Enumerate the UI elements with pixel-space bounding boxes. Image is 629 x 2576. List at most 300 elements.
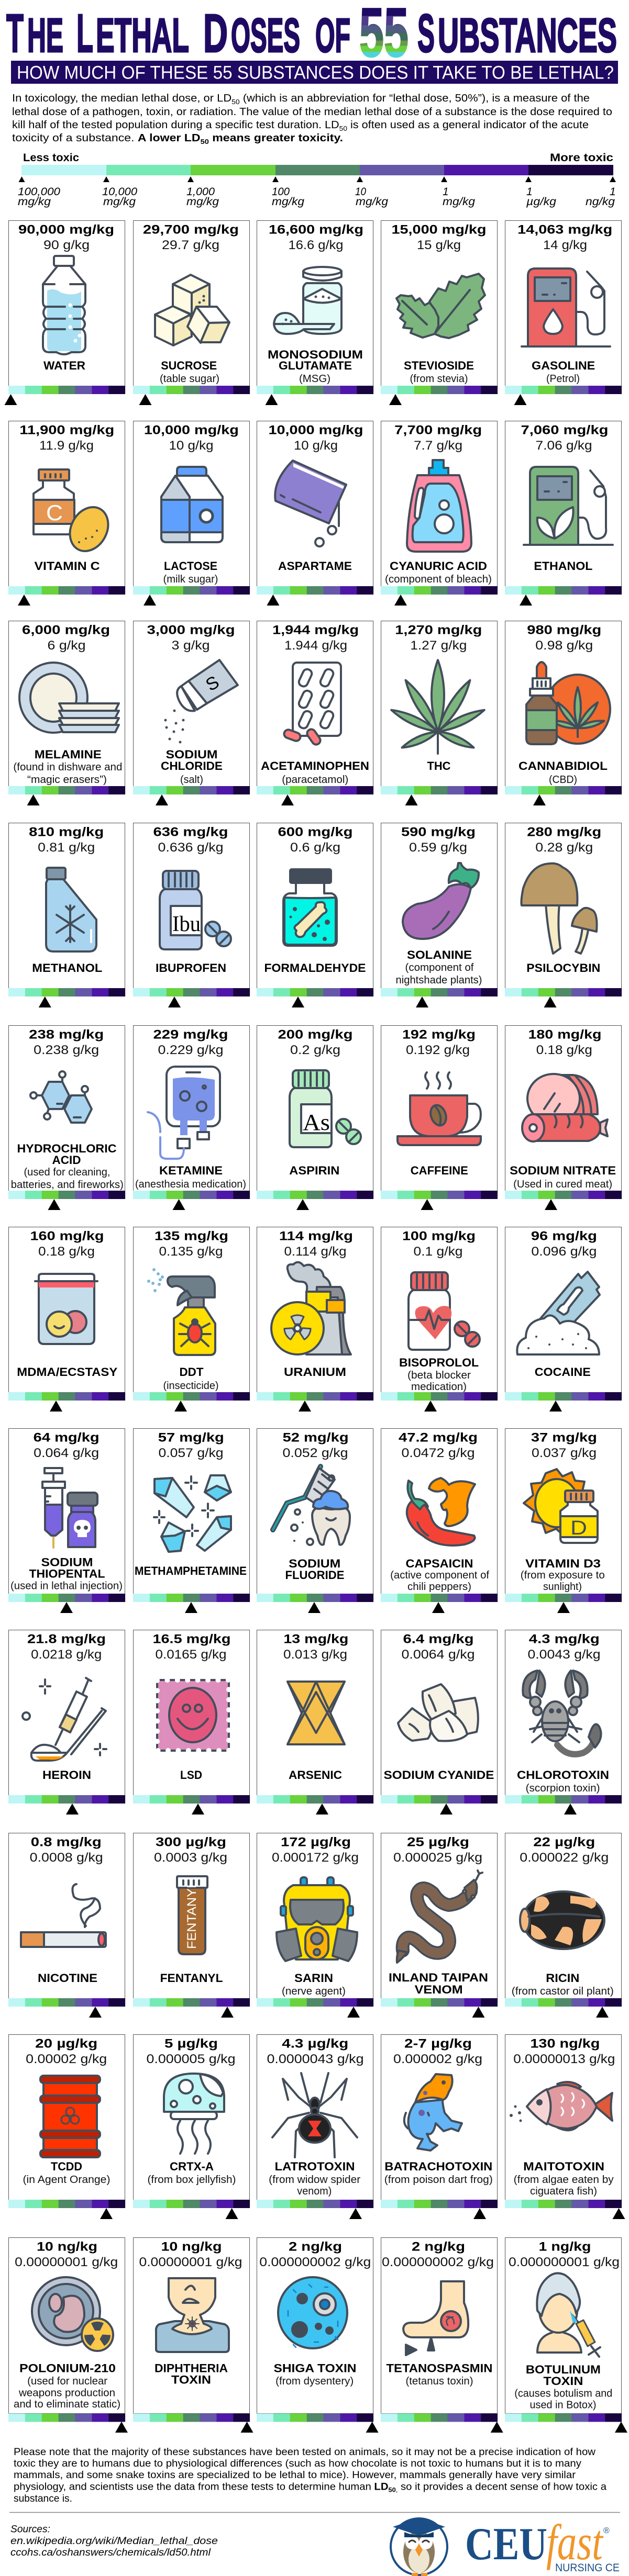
sodium nitrate dose: 180 mg/kg <box>528 1028 601 1041</box>
maitotoxin name <box>514 2160 614 2197</box>
msg name: GLUTAMATE <box>279 359 352 372</box>
aspirin dose: 0.2 g/kg <box>290 1043 340 1057</box>
maitotoxin name: MAITOTOXIN <box>523 2160 604 2173</box>
shiga dose: 2 ng/kg <box>289 2240 342 2254</box>
icon: milk carton <box>161 467 223 542</box>
cocaine dose <box>531 1229 597 1259</box>
crtx-a name <box>148 2160 236 2186</box>
latrotoxin name <box>269 2160 361 2197</box>
scale marker <box>226 2208 238 2219</box>
melamine name: (found in dishware and <box>13 761 122 773</box>
diphtheria dose: 0.00000001 g/kg <box>139 2255 242 2269</box>
sources: en.wikipedia.org/wiki/Median_lethal_dose <box>10 2536 218 2547</box>
vitamin d3 name <box>521 1557 605 1593</box>
scale marker <box>173 1199 185 1210</box>
caffeine dose <box>402 1028 476 1057</box>
ricin name: RICIN <box>546 1972 579 1985</box>
icon: sun and bottle: D <box>570 1517 587 1539</box>
diphtheria name: TOXIN <box>171 2373 211 2387</box>
title: ETHAL <box>96 9 189 62</box>
sodium nitrate name: SODIUM NITRATE <box>510 1164 616 1177</box>
scale marker <box>174 1401 187 1412</box>
icon: pill bag <box>35 1274 97 1344</box>
scale marker <box>533 794 546 805</box>
diphtheria dose: 10 ng/kg <box>161 2240 222 2254</box>
sodium chloride name: (salt) <box>180 774 203 786</box>
card: lactose <box>133 421 250 606</box>
toxicity scale legend: 1 <box>526 186 533 198</box>
shiga name: SHIGA TOXIN <box>273 2361 356 2375</box>
sucrose name: SUCROSE <box>161 359 217 372</box>
water name: WATER <box>43 359 85 372</box>
scale marker <box>557 1602 570 1613</box>
title: T <box>6 3 24 63</box>
inland taipan dose <box>393 1835 482 1865</box>
sources <box>10 2524 218 2558</box>
intro paragraph: is often used as a general indicator of the acute <box>347 119 589 131</box>
sarin name <box>282 1972 346 1997</box>
aspartame name: ASPARTAME <box>278 559 352 573</box>
vitamin d3 name: (from exposure to <box>521 1570 605 1581</box>
arsenic dose: 13 mg/kg <box>283 1632 348 1647</box>
sucrose dose <box>143 223 239 252</box>
card: batrachotoxin <box>381 2035 498 2219</box>
intro paragraph: toxicity of a substance. A lower LD <box>12 132 193 144</box>
capsaicin name: chili peppers) <box>407 1581 471 1593</box>
heroin dose: 0.0218 g/kg <box>31 1648 102 1662</box>
batrachotoxin dose <box>393 2037 482 2066</box>
capsaicin name <box>390 1557 490 1593</box>
maitotoxin dose: 0.00000013 g/kg <box>513 2052 615 2066</box>
capsaicin name: (active component of <box>390 1570 490 1581</box>
thc name: THC <box>427 759 451 772</box>
scale marker <box>50 1401 62 1412</box>
intro paragraph: 50 <box>201 138 209 145</box>
tetanospasmin name: TETANOSPASMIN <box>387 2361 492 2375</box>
botulinum name: BOTULINUM <box>526 2363 601 2376</box>
water dose <box>18 223 114 252</box>
card: methamphetamine <box>133 1429 250 1613</box>
icon: lsd stamp <box>157 1680 229 1751</box>
batrachotoxin name <box>384 2160 493 2186</box>
ibuprofen dose: 636 mg/kg <box>153 825 228 839</box>
water dose: 90 g/kg <box>43 238 90 252</box>
aspirin dose <box>278 1028 353 1057</box>
toxicity scale legend: 100 <box>272 186 290 198</box>
ddt dose: 135 mg/kg <box>155 1229 228 1244</box>
nicotine dose: 0.0008 g/kg <box>30 1851 103 1865</box>
sodium nitrate dose: 0.18 g/kg <box>536 1043 592 1057</box>
icon: sun and bottle <box>524 1469 598 1543</box>
botulinum name: TOXIN <box>543 2375 583 2388</box>
card: ricin <box>505 1833 622 2018</box>
toxicity scale legend <box>18 152 616 208</box>
inland taipan name: INLAND TAIPAN <box>389 1971 488 1984</box>
uranium dose: 114 mg/kg <box>279 1229 353 1244</box>
thc dose <box>395 623 482 653</box>
sodium cyanide dose <box>401 1632 474 1662</box>
fentanyl name: FENTANYL <box>160 1972 223 1985</box>
toxicity scale legend: mg/kg <box>443 196 475 208</box>
card: methanol <box>8 823 125 1007</box>
card: arsenic <box>257 1630 373 1815</box>
icon: sugar cubes <box>155 275 229 345</box>
chlorotoxin name: (scorpion toxin) <box>526 1783 600 1794</box>
nicotine dose <box>30 1835 103 1865</box>
scale marker <box>544 996 556 1007</box>
cannabidiol name: CANNABIDIOL <box>518 759 608 772</box>
title: OF <box>315 9 350 62</box>
solanine name: SOLANINE <box>407 948 472 961</box>
lactose dose: 10,000 mg/kg <box>144 423 239 438</box>
melamine dose: 6 g/kg <box>47 639 86 653</box>
icon: poison dart frog <box>404 2074 462 2151</box>
title: HE <box>27 9 63 62</box>
hydrochloric acid name: ACID <box>52 1153 81 1167</box>
formaldehyde dose <box>278 825 353 855</box>
card: monosodium glutamate <box>257 221 373 405</box>
scale marker <box>60 1602 73 1613</box>
ibuprofen dose <box>153 825 228 855</box>
formaldehyde dose: 0.6 g/kg <box>290 841 340 855</box>
shiga name: (from dysentery) <box>275 2376 354 2387</box>
scale marker <box>281 794 294 805</box>
sodium cyanide name: SODIUM CYANIDE <box>383 1768 494 1782</box>
sucrose dose: 29.7 g/kg <box>162 238 219 252</box>
hydrochloric acid name <box>11 1142 124 1191</box>
ddt name <box>163 1365 219 1392</box>
chlorotoxin dose: 0.0043 g/kg <box>528 1648 600 1662</box>
scale marker <box>48 1199 60 1210</box>
toxicity scale legend: mg/kg <box>186 196 219 208</box>
card: acetaminophen <box>257 621 373 805</box>
ketamine dose: 0.229 g/kg <box>158 1043 223 1057</box>
methamphetamine dose: 57 mg/kg <box>158 1431 224 1444</box>
icon: water bottle <box>43 256 85 354</box>
psilocybin dose: 280 mg/kg <box>527 825 601 839</box>
cannabidiol dose <box>527 623 601 653</box>
latrotoxin dose <box>267 2037 363 2066</box>
sodium fluoride name: SODIUM <box>289 1557 340 1570</box>
hydrochloric acid name: batteries, and fireworks) <box>11 1179 124 1191</box>
icon: biofuel pump <box>524 467 613 545</box>
methamphetamine dose: 0.057 g/kg <box>158 1446 223 1460</box>
vitamin c dose <box>19 423 114 453</box>
lactose dose <box>144 423 239 453</box>
latrotoxin dose: 0.0000043 g/kg <box>267 2052 363 2066</box>
toxicity scale legend: 100,000 <box>18 186 60 198</box>
scale marker <box>27 794 40 805</box>
scale marker <box>615 2422 627 2433</box>
vitamin d3 name: VITAMIN D3 <box>525 1557 601 1570</box>
card: chlorotoxin <box>505 1630 622 1815</box>
icon: agent orange barrel <box>40 2076 100 2157</box>
heroin dose <box>27 1632 106 1662</box>
polonium dose: 0.00000001 g/kg <box>15 2255 118 2269</box>
icon: box jellyfish <box>164 2074 224 2154</box>
ibuprofen name: IBUPROFEN <box>156 961 226 975</box>
sodium chloride dose: 3,000 mg/kg <box>147 623 235 637</box>
ketamine name <box>135 1164 246 1190</box>
sodium fluoride dose <box>283 1431 349 1460</box>
card: vitamin c <box>8 421 125 606</box>
subtitle banner: HOW MUCH OF THESE 55 SUBSTANCES DOES IT TAKE TO BE LETHAL? <box>17 63 614 83</box>
gasoline dose: 14,063 mg/kg <box>517 223 612 237</box>
caffeine name: CAFFEINE <box>411 1164 468 1177</box>
mdma dose: 0.18 g/kg <box>38 1245 95 1259</box>
sarin name: SARIN <box>294 1972 333 1985</box>
vitamin d3 name: sunlight) <box>543 1581 582 1593</box>
icon: razor and powder <box>517 1272 600 1354</box>
solanine dose: 0.59 g/kg <box>409 841 467 855</box>
sarin name: (nerve agent) <box>282 1986 346 1997</box>
sodium chloride dose: 3 g/kg <box>172 639 209 653</box>
acetaminophen name: (paracetamol) <box>282 774 348 786</box>
footnote paragraph: so it provides a decent sense of how toxic a <box>398 2482 606 2492</box>
cocaine dose: 96 mg/kg <box>531 1229 597 1244</box>
toxicity scale legend: mg/kg <box>18 196 51 208</box>
bisoprolol dose <box>402 1229 476 1259</box>
latrotoxin dose: 4.3 µg/kg <box>282 2037 348 2051</box>
icon: blister pack <box>283 663 341 746</box>
psilocybin dose <box>527 825 601 855</box>
card: inland taipan venom <box>381 1833 498 2018</box>
maitotoxin name: ciguatera fish) <box>530 2186 597 2197</box>
aspirin dose: 200 mg/kg <box>278 1028 353 1041</box>
tetanospasmin dose: 0.000000002 g/kg <box>382 2255 494 2269</box>
scale marker <box>185 1602 197 1613</box>
icon: ibuprofen bottle: Ibu <box>172 912 201 936</box>
footnote paragraph: substance is. <box>14 2493 72 2504</box>
card: sodium fluoride <box>257 1429 373 1613</box>
card: cannabidiol <box>505 621 622 805</box>
gasoline dose: 14 g/kg <box>543 238 587 252</box>
footnote paragraph: physiology, and scientists use the data from these tests to determine human LD <box>14 2482 388 2492</box>
hydrochloric acid dose <box>29 1028 104 1057</box>
card: sarin <box>257 1833 373 2018</box>
icon: swollen neck <box>156 2278 229 2352</box>
title: S <box>417 3 435 63</box>
intro paragraph: kill half of the tested population during a specific test duration. LD <box>12 119 322 131</box>
ricin dose: 22 µg/kg <box>533 1835 595 1850</box>
title: D <box>203 3 228 63</box>
aspartame dose <box>268 423 363 453</box>
psilocybin name: PSILOCYBIN <box>526 961 600 975</box>
botulinum dose: 1 ng/kg <box>538 2240 591 2254</box>
msg name <box>268 348 363 385</box>
bisoprolol dose: 100 mg/kg <box>402 1229 476 1244</box>
title: OSES <box>231 9 300 62</box>
sodium thiopental name: SODIUM <box>41 1555 93 1569</box>
sodium chloride dose <box>147 623 235 653</box>
polonium name <box>14 2361 120 2410</box>
icon: cbd oil and leaf <box>526 662 610 744</box>
batrachotoxin dose: 0.000002 g/kg <box>393 2052 482 2066</box>
thc dose: 1,270 mg/kg <box>395 623 482 637</box>
ricin dose <box>520 1835 609 1865</box>
lactose name: (milk sugar) <box>163 574 218 585</box>
scale marker <box>156 794 168 805</box>
icon: botox injection <box>537 2273 600 2357</box>
caffeine dose: 0.192 g/kg <box>406 1043 470 1057</box>
card: aspartame <box>257 421 373 606</box>
scale marker <box>613 2208 625 2219</box>
card: ethanol <box>505 421 622 606</box>
icon: mushrooms <box>521 864 597 954</box>
acetaminophen dose <box>272 623 359 653</box>
ketamine dose: 229 mg/kg <box>153 1028 228 1041</box>
scale marker <box>316 1804 328 1815</box>
sources: Sources: <box>10 2524 50 2535</box>
card: aspirin <box>257 1026 373 1210</box>
card: ibuprofen <box>133 823 250 1007</box>
msg dose <box>269 223 363 252</box>
scale marker <box>394 595 407 606</box>
card: stevioside <box>381 221 498 405</box>
cyanuric acid name: CYANURIC ACID <box>390 559 487 573</box>
icon: crystals <box>154 1475 231 1552</box>
ethanol name: ETHANOL <box>534 559 592 573</box>
intro paragraph: lethal dose of a pathogen, toxin, or radiation. The value of the median lethal dose of a substance is the dose required to <box>12 106 612 118</box>
toxicity scale legend: 1,000 <box>186 186 215 198</box>
scale marker <box>347 2007 360 2018</box>
acetaminophen name <box>261 759 369 786</box>
scale marker <box>596 2007 609 2018</box>
ricin name: (from castor oil plant) <box>512 1986 614 1997</box>
scale marker <box>549 1401 562 1412</box>
vitamin d3 dose: 37 mg/kg <box>531 1431 597 1444</box>
botulinum dose <box>509 2240 620 2269</box>
sucrose dose: 29,700 mg/kg <box>143 223 239 237</box>
footnote paragraph: Please note that the majority of these substances have been tested on animals, so it may not be a precise indication of how <box>14 2447 595 2458</box>
sodium chloride name: CHLORIDE <box>161 759 223 772</box>
lsd dose: 0.0165 g/kg <box>155 1648 226 1662</box>
sodium thiopental dose: 0.064 g/kg <box>34 1446 99 1460</box>
arsenic dose <box>283 1632 348 1662</box>
solanine name: (component of <box>405 962 474 973</box>
logo: ceufast wordmark: fast <box>546 2514 604 2570</box>
card: mdma <box>8 1227 125 1412</box>
scale marker <box>115 2422 128 2433</box>
card: fentanyl <box>133 1833 250 2018</box>
icon: pouring packet <box>275 461 346 546</box>
methanol dose: 810 mg/kg <box>29 825 104 839</box>
inland taipan name: VENOM <box>415 1983 463 1996</box>
scale marker <box>405 794 418 805</box>
card: formaldehyde <box>257 823 373 1007</box>
icon: toothbrush and tooth <box>273 1466 350 1545</box>
stevioside dose <box>392 223 486 252</box>
logo: ceufast wordmark: ® <box>603 2526 610 2535</box>
caffeine dose: 192 mg/kg <box>402 1028 476 1041</box>
sodium thiopental name <box>10 1555 123 1592</box>
card: water <box>4 221 125 405</box>
scale marker <box>514 394 527 405</box>
hydrochloric acid name: HYDROCHLORIC <box>17 1142 117 1155</box>
hydrochloric acid name: (used for cleaning, <box>24 1167 110 1178</box>
gasoline name: GASOLINE <box>532 359 595 372</box>
bisoprolol name: (beta blocker <box>407 1370 471 1381</box>
psilocybin dose: 0.28 g/kg <box>535 841 593 855</box>
ricin dose: 0.000022 g/kg <box>520 1851 609 1865</box>
intro paragraph: means greater toxicity. <box>209 132 343 144</box>
toxicity scale legend: 10 <box>355 186 366 198</box>
toxicity scale legend: 10,000 <box>102 186 137 198</box>
fentanyl dose: 0.0003 g/kg <box>154 1851 227 1865</box>
icon: gas pump <box>522 268 610 346</box>
card: tcdd <box>8 2035 125 2219</box>
scale marker <box>472 2007 485 2018</box>
aspartame dose: 10,000 mg/kg <box>268 423 363 438</box>
card: gasoline <box>505 221 622 405</box>
arsenic dose: 0.013 g/kg <box>283 1648 347 1662</box>
nicotine dose: 0.8 mg/kg <box>31 1835 102 1850</box>
card: cyanuric acid <box>381 421 498 606</box>
logo: owl mascot <box>391 2518 447 2576</box>
card: ddt <box>133 1227 250 1412</box>
capsaicin dose <box>399 1431 478 1460</box>
icon: msg jar and spoon <box>274 267 341 334</box>
footnote paragraph <box>14 2447 606 2504</box>
icon: black widow spider <box>272 2073 357 2157</box>
crtx-a dose: 5 µg/kg <box>164 2037 218 2051</box>
cannabidiol dose: 0.98 g/kg <box>535 639 593 653</box>
nicotine name: NICOTINE <box>38 1972 97 1985</box>
diphtheria dose <box>139 2240 242 2269</box>
lactose dose: 10 g/kg <box>169 439 214 453</box>
cocaine dose: 0.096 g/kg <box>531 1245 597 1259</box>
sodium nitrate name <box>510 1164 616 1190</box>
polonium name: POLONIUM-210 <box>19 2361 116 2375</box>
logo: ceufast wordmark: CEU <box>465 2519 547 2570</box>
card: vitamin d3 <box>505 1429 622 1613</box>
toxicity scale legend: ng/kg <box>586 196 615 208</box>
card: psilocybin <box>505 823 622 1007</box>
scale marker <box>39 996 51 1007</box>
stevioside dose: 15,000 mg/kg <box>392 223 486 237</box>
sarin dose: 0.000172 g/kg <box>272 1851 359 1865</box>
latrotoxin name: venom) <box>297 2186 332 2197</box>
methanol dose: 0.81 g/kg <box>38 841 95 855</box>
crtx-a dose: 0.000005 g/kg <box>147 2052 236 2066</box>
sodium fluoride name <box>285 1557 345 1582</box>
sodium nitrate dose <box>528 1028 601 1057</box>
scale marker <box>192 1804 204 1815</box>
formaldehyde name: FORMALDEHYDE <box>264 961 366 975</box>
scale marker <box>241 2422 253 2433</box>
tcdd dose: 20 µg/kg <box>35 2037 97 2051</box>
scale marker <box>440 1804 453 1815</box>
scale marker <box>473 2208 486 2219</box>
tetanospasmin name <box>387 2361 492 2387</box>
msg name: (MSG) <box>299 373 330 385</box>
sodium nitrate name: (Used in cured meat) <box>513 1179 612 1190</box>
gasoline dose <box>517 223 612 252</box>
tetanospasmin name: (tetanus toxin) <box>405 2376 473 2387</box>
capsaicin dose: 0.0472 g/kg <box>401 1446 474 1460</box>
ethanol dose: 7.06 g/kg <box>536 439 592 453</box>
tetanospasmin dose <box>382 2240 494 2269</box>
title <box>6 0 617 71</box>
logo: ceufast wordmark <box>465 2514 620 2574</box>
card: heroin <box>8 1630 125 1815</box>
icon: molecule <box>30 1071 92 1123</box>
tcdd name: (in Agent Orange) <box>23 2174 110 2186</box>
cocaine name: COCAINE <box>535 1365 591 1379</box>
hydrochloric acid dose: 238 mg/kg <box>29 1028 104 1041</box>
icon: cannabis leaf <box>390 660 486 754</box>
bisoprolol name: medication) <box>411 1381 467 1393</box>
